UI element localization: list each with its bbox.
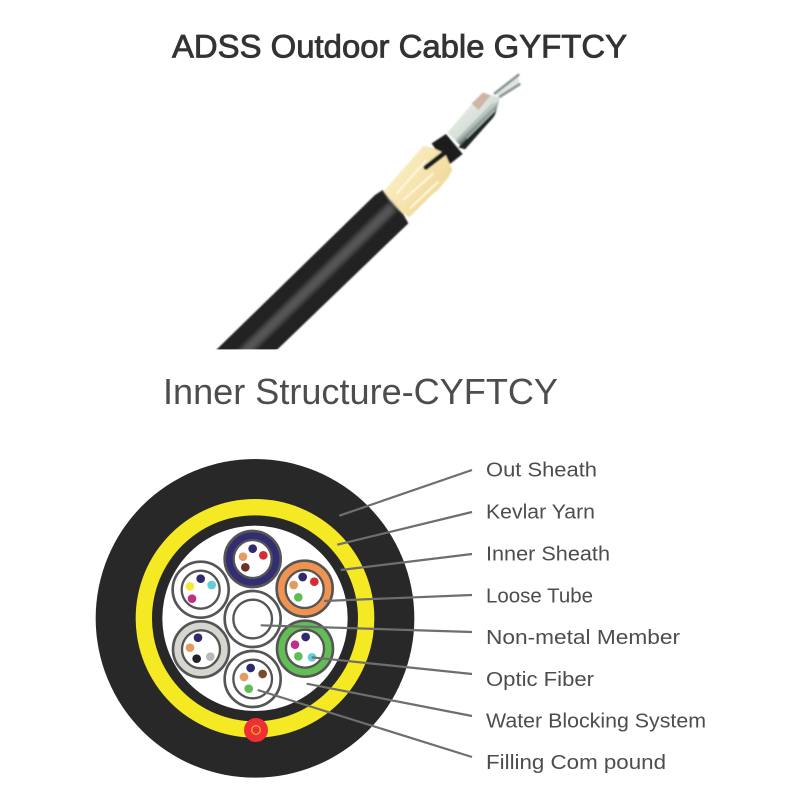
kevlar yarn ring	[136, 499, 374, 738]
component labels	[486, 459, 706, 774]
component labels: Kevlar Yarn	[486, 501, 595, 524]
cable photo illustration	[213, 75, 519, 353]
tube: orange	[277, 561, 333, 617]
tube: centre member	[225, 591, 281, 647]
cable cross-section diagram	[96, 459, 414, 778]
component labels: Water Blocking System	[486, 709, 706, 732]
infographic canvas	[96, 34, 705, 778]
subtitle: Inner Structure-CYFTCY	[163, 371, 558, 412]
optic fibre bundle	[447, 93, 500, 149]
component labels: Optic Fiber	[486, 668, 594, 691]
inner sheath ring	[152, 515, 358, 721]
tube: navy	[225, 531, 281, 587]
tube: green	[277, 621, 333, 677]
kevlar yarn	[383, 146, 452, 217]
outer sheath ring	[96, 459, 414, 778]
component labels: Out Sheath	[486, 459, 597, 482]
tube: grey	[173, 621, 229, 677]
tube: white bottom	[225, 651, 281, 707]
component labels: Non-metal Member	[486, 626, 680, 649]
cable tips	[495, 75, 519, 97]
title: ADSS Outdoor Cable GYFTCY	[172, 28, 627, 64]
outer sheath	[213, 190, 408, 353]
component labels: Loose Tube	[486, 585, 593, 608]
leader lines	[258, 470, 472, 757]
inner sheath segment	[432, 134, 463, 164]
red marker	[244, 718, 268, 742]
component labels: Inner Sheath	[486, 543, 610, 566]
component labels: Filling Com pound	[486, 751, 666, 774]
water blocking area	[162, 526, 348, 711]
tube: white upper left	[173, 562, 229, 618]
